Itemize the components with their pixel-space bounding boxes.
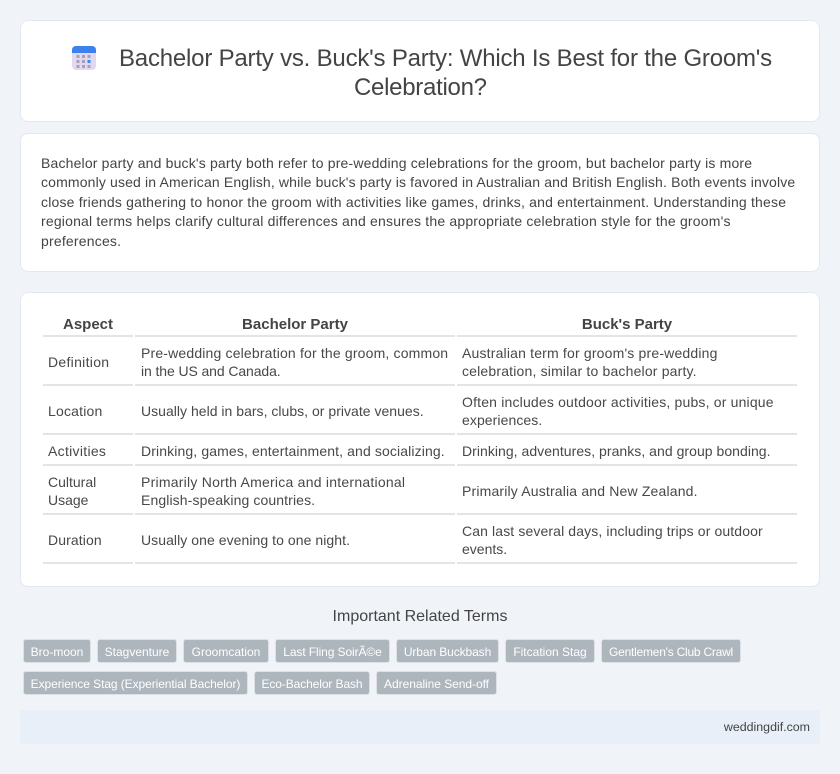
chip: Groomcation: Groomcation: [192, 645, 260, 659]
row: definition: in the US and Canada.: [141, 363, 281, 379]
description card: [20, 133, 820, 272]
row: activities: Drinking, adventures, pranks, and group bonding.: [462, 443, 771, 459]
row: duration: Duration: [48, 532, 102, 548]
chip: Stagventure: Stagventure: [105, 645, 169, 659]
row: cultural usage: Primarily North America and international: [141, 474, 405, 490]
table card: [20, 292, 820, 587]
chip: Urban Buckbash: Urban Buckbash: [404, 645, 491, 659]
related terms heading: Important Related Terms: [333, 608, 507, 625]
row: location: Usually held in bars, clubs, or private venues.: [141, 403, 424, 419]
title: [119, 45, 772, 101]
row: activities: Drinking, games, entertainment, and socializing.: [141, 443, 445, 459]
description text: preferences.: [41, 233, 121, 249]
title: Bachelor Party vs. Buck's Party: Which Is Best for the Groom's: [119, 45, 772, 72]
row: cultural usage: Usage: [48, 492, 88, 508]
related term chips: [23, 639, 741, 695]
chip: Adrenaline Send-off: Adrenaline Send-off: [384, 677, 489, 691]
row: cultural usage: English-speaking countries.: [141, 492, 315, 508]
row: duration: Usually one evening to one night.: [141, 532, 350, 548]
chip: Gentlemen's Club Crawl: [601, 639, 741, 663]
row: activities: Activities: [48, 443, 106, 459]
row: location: Often includes outdoor activities, pubs, or unique: [462, 394, 774, 410]
chip: Stagventure: [97, 639, 177, 663]
chip: Urban Buckbash: [396, 639, 499, 663]
row: location: Location: [48, 403, 103, 419]
chip: Groomcation: [183, 639, 269, 663]
table header: [63, 316, 672, 333]
description text: [41, 155, 795, 249]
row: location: experiences.: [462, 412, 542, 428]
row: definition: [48, 345, 718, 379]
description text: regional terms helps clarify cultural differences and ensures the appropriate celebration style for the groom's: [41, 213, 731, 229]
table header: Buck's Party: [582, 316, 672, 333]
chip: Gentlemen's Club Crawl: Gentlemen's Club Crawl: [609, 645, 733, 659]
row: duration: Can last several days, including trips or outdoor: [462, 523, 763, 539]
chip: Last Fling Soirée: [275, 639, 390, 663]
row: cultural usage: Cultural: [48, 474, 96, 490]
chip: Fitcation Stag: [505, 639, 595, 663]
row: location: [48, 394, 774, 428]
row: definition: Australian term for groom's pre-wedding: [462, 345, 718, 361]
description text: Bachelor party and buck's party both refer to pre-wedding celebrations for the groom, but bachelor party is more: [41, 155, 752, 171]
chip: Eco-Bachelor Bash: Eco-Bachelor Bash: [261, 677, 363, 691]
chip: Eco-Bachelor Bash: [254, 671, 370, 695]
row: definition: celebration, similar to bachelor party.: [462, 363, 697, 379]
description text: commonly used in American English, while buck's party is favored in Australian and British English. Both events involve: [41, 174, 795, 190]
row: duration: [48, 523, 763, 557]
table header: Bachelor Party: [242, 316, 348, 333]
icon: calendar: [72, 46, 96, 70]
table header: Aspect: [63, 316, 113, 333]
chip: Adrenaline Send-off: [376, 671, 497, 695]
description text: close friends gathering to honor the groom with activities like games, drinks, and entertainment. Understanding these: [41, 194, 786, 210]
footer bar: [20, 710, 820, 744]
row: activities: [48, 443, 771, 459]
chip: Last Fling Soirée: Last Fling SoirÃ©e: [283, 645, 382, 659]
chip: Bro-moon: Bro-moon: [31, 645, 83, 659]
chip: Experience Stag: [23, 671, 248, 695]
row: definition: Definition: [48, 354, 109, 370]
footer credit: weddingdif.com: [724, 720, 810, 734]
chip: Experience Stag: Experience Stag (Experiential Bachelor): [31, 677, 240, 691]
row: definition: Pre-wedding celebration for the groom, common: [141, 345, 448, 361]
chip: Fitcation Stag: Fitcation Stag: [513, 645, 587, 659]
comparison table: [43, 316, 797, 564]
row: cultural usage: [48, 474, 698, 508]
header card: [20, 20, 820, 122]
chip: Bro-moon: [23, 639, 91, 663]
title: Celebration?: [354, 74, 487, 101]
row: cultural usage: Primarily Australia and New Zealand.: [462, 483, 698, 499]
row: duration: events.: [462, 541, 507, 557]
